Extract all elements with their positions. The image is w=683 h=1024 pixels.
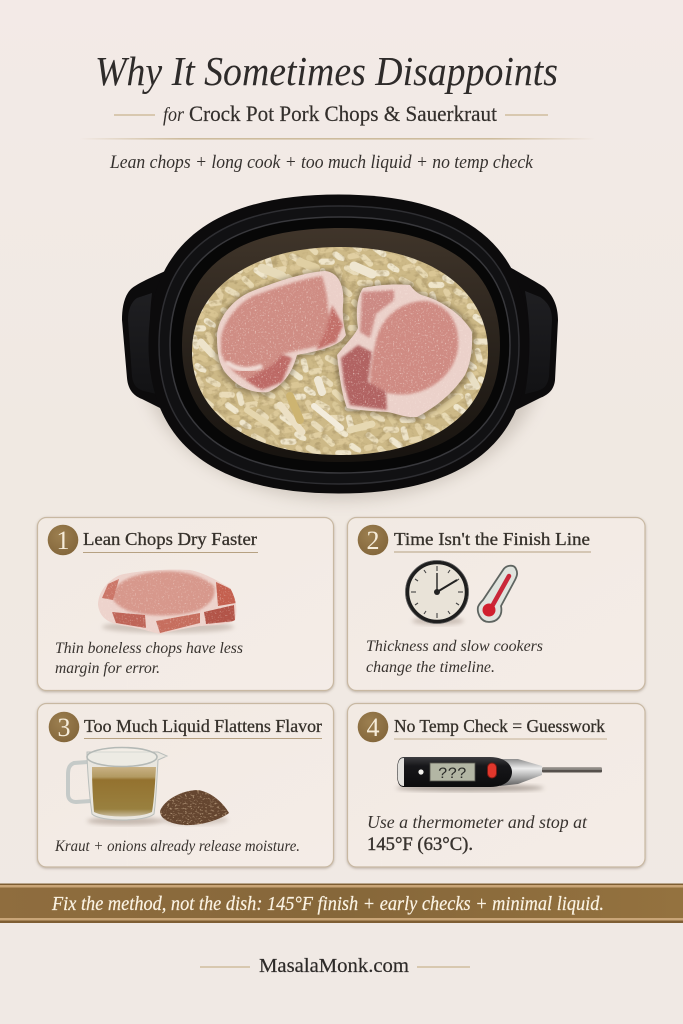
heading 2: Time Isn't the Finish Line [394,529,590,549]
badge 4 [358,712,388,742]
tagline: Lean chops + long cook + too much liquid + no temp check [109,153,534,173]
body text 4: Use a thermometer and stop at [367,812,588,832]
icon: clock [406,560,468,625]
body text 1: margin for error. [55,660,160,677]
title: Why It Sometimes Disappoints [95,48,558,94]
icon: digital thermometer [396,757,602,792]
icon: thermometer [478,566,517,622]
banner: fix the method: Fix the method, not the dish: 145°F finish + early checks + minimal liquid. [51,893,604,915]
body text 4 [367,812,588,855]
crock interior wall [182,228,500,462]
heading 3: Too Much Liquid Flattens Flavor [84,716,322,736]
card 1: Lean Chops Dry Faster [38,518,334,690]
badge 3: 3 [58,713,70,742]
body text 2: change the timeline. [366,659,495,676]
card 3: Too Much Liquid Flattens Flavor [38,704,334,867]
pork chop left [215,270,350,395]
sauerkraut bed [188,242,492,460]
illustration: crock pot with pork chops and sauerkraut [122,194,558,500]
badge 1 [48,525,78,555]
right handle [508,266,558,414]
body text 3: Kraut + onions already release moisture. [54,838,300,855]
badge 1: 1 [56,526,70,555]
icon: caraway seeds [158,788,230,826]
body text 4: 145°F (63°C). [367,835,473,855]
card 2: Time Isn't the Finish Line [348,518,645,690]
heading 1: Lean Chops Dry Faster [83,529,257,549]
body text 2 [366,638,543,676]
icon: raw pork chop [98,570,236,635]
icon: measuring jug of broth [68,748,167,825]
badge 3 [49,712,79,742]
badge 4: 4 [366,713,380,742]
subtitle: for [163,104,184,126]
left handle [122,268,172,414]
subtitle: Crock Pot Pork Chops & Sauerkraut [189,101,497,126]
pork chop right [335,284,475,419]
badge 2: 2 [366,526,380,555]
crock outer body [148,194,528,494]
icon: digital thermometer: ??? [438,765,467,783]
body text 1: Thin boneless chops have less [55,640,243,657]
body text 2: Thickness and slow cookers [366,638,543,655]
card 4: No Temp Check = Guesswork [348,704,645,867]
badge 2 [358,525,388,555]
heading 4: No Temp Check = Guesswork [394,716,605,736]
banner: fix the method [0,884,683,923]
body text 1 [55,640,243,677]
footer: MasalaMonk.com: MasalaMonk.com [259,955,409,977]
